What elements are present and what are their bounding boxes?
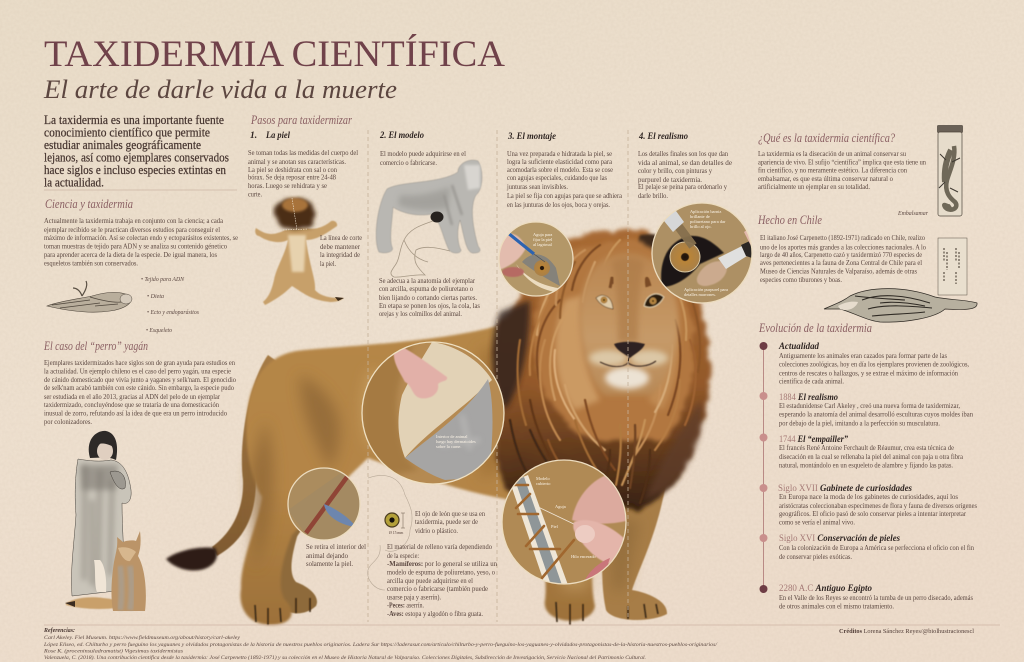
mane (492, 230, 710, 510)
text: step 3: logra la suficiente elasticidad como para (507, 157, 613, 166)
icon: bird specimen (824, 289, 977, 322)
references: Rose K. (proceninsuladramatist) Vigesimas taxidermistas (43, 648, 183, 654)
heading: ciencia: Ciencia y taxidermia (45, 197, 133, 211)
text: ciencia: para aprender acerca de la dieta de la especie. De igual manera, los (44, 250, 217, 259)
entry: 1744: 1744 El “empailler” (779, 434, 848, 445)
text: filling material: El material de relleno varía dependiendo (387, 542, 492, 551)
text: step 3: La piel se fija con agujas para que se adhiera (507, 191, 623, 200)
text: step 2 intro: El modelo puede adquirirse en el (380, 149, 466, 158)
references: Referencias: (43, 628, 75, 634)
entry: siglo XVII: como se vería el animal vivo. (779, 518, 855, 526)
icon: sketched bird specimen (47, 281, 132, 312)
text: eye note (415, 509, 485, 535)
labels: samples collected: • Dieta (147, 294, 164, 300)
eyes (596, 294, 664, 309)
text: step 1: animal y se anotan sus características. (248, 157, 346, 166)
credits: Créditos Lorena Sánchez Reyes/@biolhustracionescl (839, 628, 974, 635)
references (43, 628, 717, 661)
entry: siglo XVII: aristócratas coleccionaban especímenes de flora y fauna de diversos orígenes (779, 501, 977, 510)
heading: qué es: ¿Qué es la taxidermia científica? (758, 131, 896, 145)
icon: head sketch with glass eye (368, 475, 412, 590)
brows (610, 278, 650, 288)
text: perro yagán: Ejemplares taxidermizados hace siglos son de gran ayuda para estudios en (44, 358, 235, 367)
step 3 el montaje: 3. El montaje (507, 132, 557, 142)
icon: head sketch with glass eye: Ø 15 mm (389, 531, 403, 535)
labels: samples collected: • Tejido para ADN (141, 277, 185, 283)
entry: actualidad: Antiguamente los animales eran cazados para formar parte de las (779, 351, 947, 360)
entry: actualidad (778, 342, 969, 386)
text: remove interior: animal dejando (306, 551, 348, 560)
subtitle: El arte de darle vida a la muerte (43, 75, 397, 104)
heading: perro yagán: El caso del “perro” yagán (43, 339, 148, 353)
text: step 1: La piel se deshidrata con sal o con (248, 165, 337, 174)
text: perro yagán: taxidermizado, concluyéndose que se trataría de una domesticación (44, 400, 219, 409)
lion illustration (166, 230, 710, 625)
labels: samples collected: • Ecto y endoparásitos (147, 310, 200, 316)
text: step 4: color y brillo, con pinturas y (638, 166, 712, 175)
mane fur strokes (510, 240, 700, 503)
entry: actualidad: centros de rescates o hallazgos, y se extrae el máximo de información (779, 368, 958, 378)
body shading (250, 340, 640, 590)
circle: eye realism (652, 203, 754, 303)
step 3 el montaje (506, 132, 623, 209)
text: step 2 body: con arcilla, espuma de poliuretano o (379, 284, 473, 293)
circle: cutting the skin (288, 468, 360, 540)
step 4 el realismo: 4. El realismo (638, 132, 688, 142)
text: step 4: El pelaje se peina para ordenarlo y (638, 182, 727, 191)
step 1 la piel: 1. (250, 131, 257, 141)
text: ciencia (44, 216, 239, 268)
circle: eye realism: brillo al ojo. (690, 224, 712, 229)
step 2 el modelo (306, 131, 733, 618)
entry: siglo XVI (779, 534, 974, 561)
text: qué es: La taxidermia es la disecación de un animal conservar su (758, 149, 906, 158)
circle: suture: Modelo (536, 476, 550, 481)
text: hecho en chile: Museo de Ciencias Naturales de Valparaíso, además de otras (760, 267, 917, 276)
text: filling material: -Mamíferos: por lo general se utiliza un (387, 559, 497, 568)
intro paragraph: conocimiento científico que permite (44, 124, 210, 140)
text: qué es: apariencia de vivo. El sufijo “científica” implica que esta tiene un (758, 158, 926, 167)
panel: pasos para taxidermizar (43, 113, 1000, 661)
text: perro yagán: de cánido domesticado que vivía junto a yaganes y selk'nam. El genocidio (44, 375, 236, 384)
circle: eye realism: detalles marrones. (684, 292, 716, 297)
text: qué es: fin científico, y no meramente estético. La diferencia con (758, 166, 907, 175)
text: step 4 (638, 149, 733, 200)
heading: hecho en chile: Hecho en Chile (757, 213, 822, 227)
entry: 1744 (779, 434, 964, 470)
entry: 1884 (779, 393, 973, 428)
far hind leg (270, 480, 340, 613)
icon: person sculpting sketch (391, 221, 450, 277)
text: ciencia: Actualmente la taxidermia trabaja en conjunto con la ciencia; a cada (44, 216, 224, 225)
text: step 3 (506, 149, 623, 209)
intro paragraph (44, 112, 229, 190)
references: López Eliseo, ed. Chilturbo y perro fueguino los yaguanes y olvidados protagonistas de la historia de nuestros pueblos originarios. Ladera Sur https://laderasur.com/articulo/chilturbo-y-perro-fueguino-los-yaguanes-y-olvidados-protagonistas-de-la-historia-nuestros-pueblos-originarios/ (43, 641, 717, 648)
tail (212, 355, 282, 556)
entry: siglo XVII: Siglo XVII Gabinete de curiosidades (778, 484, 912, 494)
text: remove interior: Se retira el interior del (306, 542, 366, 551)
circle: eye realism: brillante de (690, 214, 710, 219)
circle: suture (502, 460, 630, 585)
entry: siglo XVII: En Europa nace la moda de los gabinetes de curiosidades, aquí los (779, 492, 958, 501)
text: step 3: acomodarla sobre el modelo. Esta se cose (507, 165, 614, 174)
entry: 1884: esperando la anatomía del animal desarrolló esculturas cuyos moldes iban (779, 410, 973, 418)
text: ciencia: ejemplar recibido se le practican diversos estudios para conseguir el (44, 225, 220, 234)
circle: eye realism: Aplicación purpurel para (684, 287, 728, 292)
text: ciencia: máximo de información. Así se colectan endo y ectoparásitos existentes, se (44, 233, 239, 242)
entry: 1744: disecación en la cual se rellenaba la piel del animal con paja u otra fibra (779, 452, 964, 461)
text: perro yagán: ser estudiada en el año 2013, gracias al ADN del pelo de un ejemplar (44, 392, 220, 401)
caption: embalsamar: Embalsamar (897, 211, 929, 217)
text: eye note: vidrio o plástico. (415, 526, 458, 535)
text: step 2 body: orejas y los colmillos del animal. (379, 309, 462, 318)
entry: 1744: natural, montándolo en un esqueleto de alambre y fijando las patas. (779, 460, 953, 470)
entry: siglo XVI: Siglo XVI Conservación de pieles (779, 534, 900, 544)
entry: actualidad: colecciones zoológicas, hoy en día los ejemplares provienen de zoológicos, (779, 360, 969, 368)
text: qué es (758, 149, 926, 191)
text: step 2 intro: comercio o fabricarse. (380, 158, 437, 167)
text: step 1: curte. (248, 190, 262, 199)
text: step 2 body (379, 276, 480, 318)
text: step 1: bórax. Se deja reposar entre 24-48 (248, 173, 336, 182)
text: step 1 (248, 148, 358, 199)
circle: skin over model (362, 342, 504, 484)
text: step 1: horas. Luego se rehidrata y se (248, 181, 328, 190)
text: hecho en chile: largo de 40 años, Carpenetto cazó y taxidermizó 770 especies de (760, 250, 923, 259)
circle: needle at eye: al lagrimal (533, 242, 553, 247)
icon: specimen label (938, 238, 967, 295)
panel: hecho en chile (757, 213, 977, 322)
face (580, 253, 678, 395)
circle: skin over model: sobre la carne. (436, 444, 461, 449)
text: step 2 body: Se adecua a la anatomía del ejemplar (379, 276, 475, 285)
text: perro yagán: la actualidad. Un ejemplo chileno es el caso del perro yagán, una especie (44, 367, 232, 376)
entry: 1884: por debajo de la piel, imitando a la perfección su musculatura. (779, 418, 940, 428)
step 2 el modelo: 2. El modelo (379, 131, 424, 141)
text: perro yagán (44, 358, 236, 426)
circle: needle at eye (499, 222, 573, 296)
intro paragraph: la actualidad. (44, 174, 104, 190)
text: filling material: comercio o fabricarse (también puede (387, 584, 489, 593)
entry: siglo XVII (778, 484, 977, 526)
text: cut line note: debe mantener (320, 242, 360, 251)
icon: specimen jar (937, 125, 963, 216)
text: remove interior: solamente la piel. (306, 559, 353, 568)
heading: pasos: Pasos para taxidermizar (250, 113, 352, 127)
text: hecho en chile (760, 233, 926, 284)
text: step 3: Una vez preparada e hidratada la piel, se (507, 149, 613, 158)
labels: samples collected (141, 277, 200, 334)
muzzle (589, 342, 668, 389)
intro paragraph: La taxidermia es una importante fuente (44, 112, 224, 127)
text: filling material: modelo de espuma de poliuretano, yeso, o (387, 568, 495, 577)
entry: 1884: 1884 El realismo (779, 393, 838, 403)
panel: perro yagán (43, 339, 236, 611)
paws (255, 598, 658, 625)
entry: 2280 A.C: En el Valle de los Reyes se encontró la tumba de un perro disecado, además (779, 593, 973, 602)
references: Carl Akeley. Fiel Museum. https://www.fieldmuseum.org/about/history/carl-akeley (44, 634, 241, 641)
text: step 2 intro (380, 149, 466, 167)
entry: actualidad: científica de cada animal. (779, 376, 844, 386)
text: filling material: usarse paja y aserrín). (387, 593, 441, 602)
text: step 4: vida al animal, se dan detalles de (638, 158, 733, 167)
entry: 2280 A.C: de otros animales con el mismo tratamiento. (779, 602, 894, 610)
entry: siglo XVII: geográficos. El oficio pasó de solo conservar pieles a intentar interpretar (779, 509, 966, 518)
entry: 1884: El estadunidense Carl Akeley , creó una nueva forma de taxidermizar, (779, 401, 960, 410)
text: step 4: darle brillo. (638, 191, 668, 200)
circle: suture: Aguja (555, 504, 566, 509)
references: Valenzuela, C. (2018). Una contribución científica desde la taxidermia: José Carpenetto (1892-1971) y su colección en el Museo de Historia Natural de Valparaíso. Colecciones Digitales, Subdirección de Investigación, Servicio Nacional del Patrimonio Cultural. (44, 654, 646, 661)
entry: 1744: El francés René Antoine Ferchault de Réaumur, crea esta técnica de (779, 443, 955, 452)
text: filling material: arcilla que puede adquirirse en el (387, 576, 473, 585)
text: qué es: embalsamar, es que esta última conservar natural o (758, 174, 893, 183)
circle: eye realism: Aplicación barniz (690, 209, 721, 214)
intro paragraph: estudiar animales geográficamente (44, 137, 201, 152)
panel: qué es la taxidermia científica (758, 125, 963, 217)
icon: selk'nam woman with fox (65, 431, 146, 611)
text: perro yagán: por colonizadores. (44, 417, 92, 426)
text: step 1: Se toman todas las medidas del cuerpo del (248, 148, 358, 157)
text: hecho en chile: aves pertenecientes a la fauna de Zona Central de Chile para el (760, 258, 922, 267)
text: step 4: purpurel de taxidermia. (638, 175, 702, 184)
text: perro yagán: de selk'nam acabó también con este cánido. Sin embargo, la especie pudo (44, 383, 234, 392)
intro paragraph: lejanos, así como ejemplares conservados (44, 150, 229, 164)
text: cut line note (320, 233, 363, 268)
step 4 el realismo (638, 132, 733, 200)
circle: suture: Piel (551, 524, 559, 529)
text: eye note: taxidermia, puede ser de (415, 517, 479, 526)
text: filling material: -Aves: estopa y algodón o fibra guata. (387, 609, 483, 618)
text: filling material: de la especie: (387, 551, 419, 560)
text: qué es: artificialmente un ejemplar en su totalidad. (758, 182, 870, 191)
text: ciencia: esqueletos también son conservados. (44, 259, 138, 268)
text: step 2 body: bien lijando o cortando ciertas partes. (379, 293, 477, 302)
text: eye note: El ojo de león que se usa en (415, 509, 485, 518)
title: TAXIDERMIA CIENTÍFICA (44, 33, 505, 75)
text: step 3: con agujas especiales, cuidando que las (507, 173, 607, 182)
text: step 3: junturas sean invisibles. (506, 182, 568, 191)
panel: evolución de la taxidermia timeline (758, 321, 977, 610)
timeline axis and dots (760, 342, 768, 593)
text: cut line note: La línea de corte (320, 233, 363, 242)
circle: suture: Hilo encerado (571, 554, 597, 559)
text: perro yagán: inusual de zorro, refutando así la idea de que era un perro introducido (44, 409, 227, 418)
text: ciencia: toman muestras de tejido para ADN y se analiza su contenido génetico (44, 242, 227, 251)
entry: 2280 A.C: 2280 A.C Antiguo Egipto (779, 584, 872, 594)
far foreleg (598, 470, 668, 620)
text: cut line note: la piel. (320, 259, 336, 268)
labels: samples collected: • Esqueleto (146, 328, 172, 334)
step 1 la piel: La piel (265, 131, 290, 141)
text: cut line note: la integridad de (320, 250, 361, 259)
text: filling material: -Peces: aserrín. (387, 601, 424, 610)
intro paragraph: hace siglos e incluso especies extintas en (44, 162, 226, 177)
body (240, 318, 620, 625)
tail tuft (166, 547, 217, 571)
circle: suture: cubierto (536, 481, 551, 486)
circle: skin over model: Interior de animal (436, 434, 468, 439)
entry: siglo XVI: de conservar pieles exóticas. (779, 552, 852, 561)
entry: siglo XVI: Con la colonización de Europa a América se perfecciona el oficio con el fin (779, 543, 974, 552)
step 1 la piel (248, 131, 363, 305)
icon: lion skin (255, 198, 344, 305)
circle: skin over model: luego hay dermatoides (436, 439, 476, 444)
circle: needle at eye: fijar la piel (533, 237, 553, 242)
entry: 2280 A.C (779, 584, 973, 610)
text: hecho en chile: especies como tiburones y boas. (760, 275, 842, 284)
icon: gray lion model (376, 160, 482, 253)
text: step 3: en las junturas de los ojos, boca y orejas. (507, 200, 610, 209)
text: hecho en chile: uno de los aportes más grandes a las colecciones nacionales. A lo (760, 242, 926, 252)
text: remove interior (306, 542, 366, 568)
circle: eye realism: poliuretano para dar (690, 219, 726, 224)
text: hecho en chile: El italiano José Carpenetto (1892-1971) radicado en Chile, realizo (760, 233, 925, 242)
heading: evolución: Evolución de la taxidermia (758, 321, 872, 335)
circle: needle at eye: Aguja para (533, 232, 552, 237)
entry: actualidad: Actualidad (778, 342, 819, 352)
text: filling material (387, 542, 497, 618)
text: step 2 body: En etapa se ponen los ojos, la cola, las (379, 301, 480, 310)
panel: ciencia y taxidermia (44, 197, 239, 334)
text: step 4: Los detalles finales son los que dan (638, 149, 728, 158)
